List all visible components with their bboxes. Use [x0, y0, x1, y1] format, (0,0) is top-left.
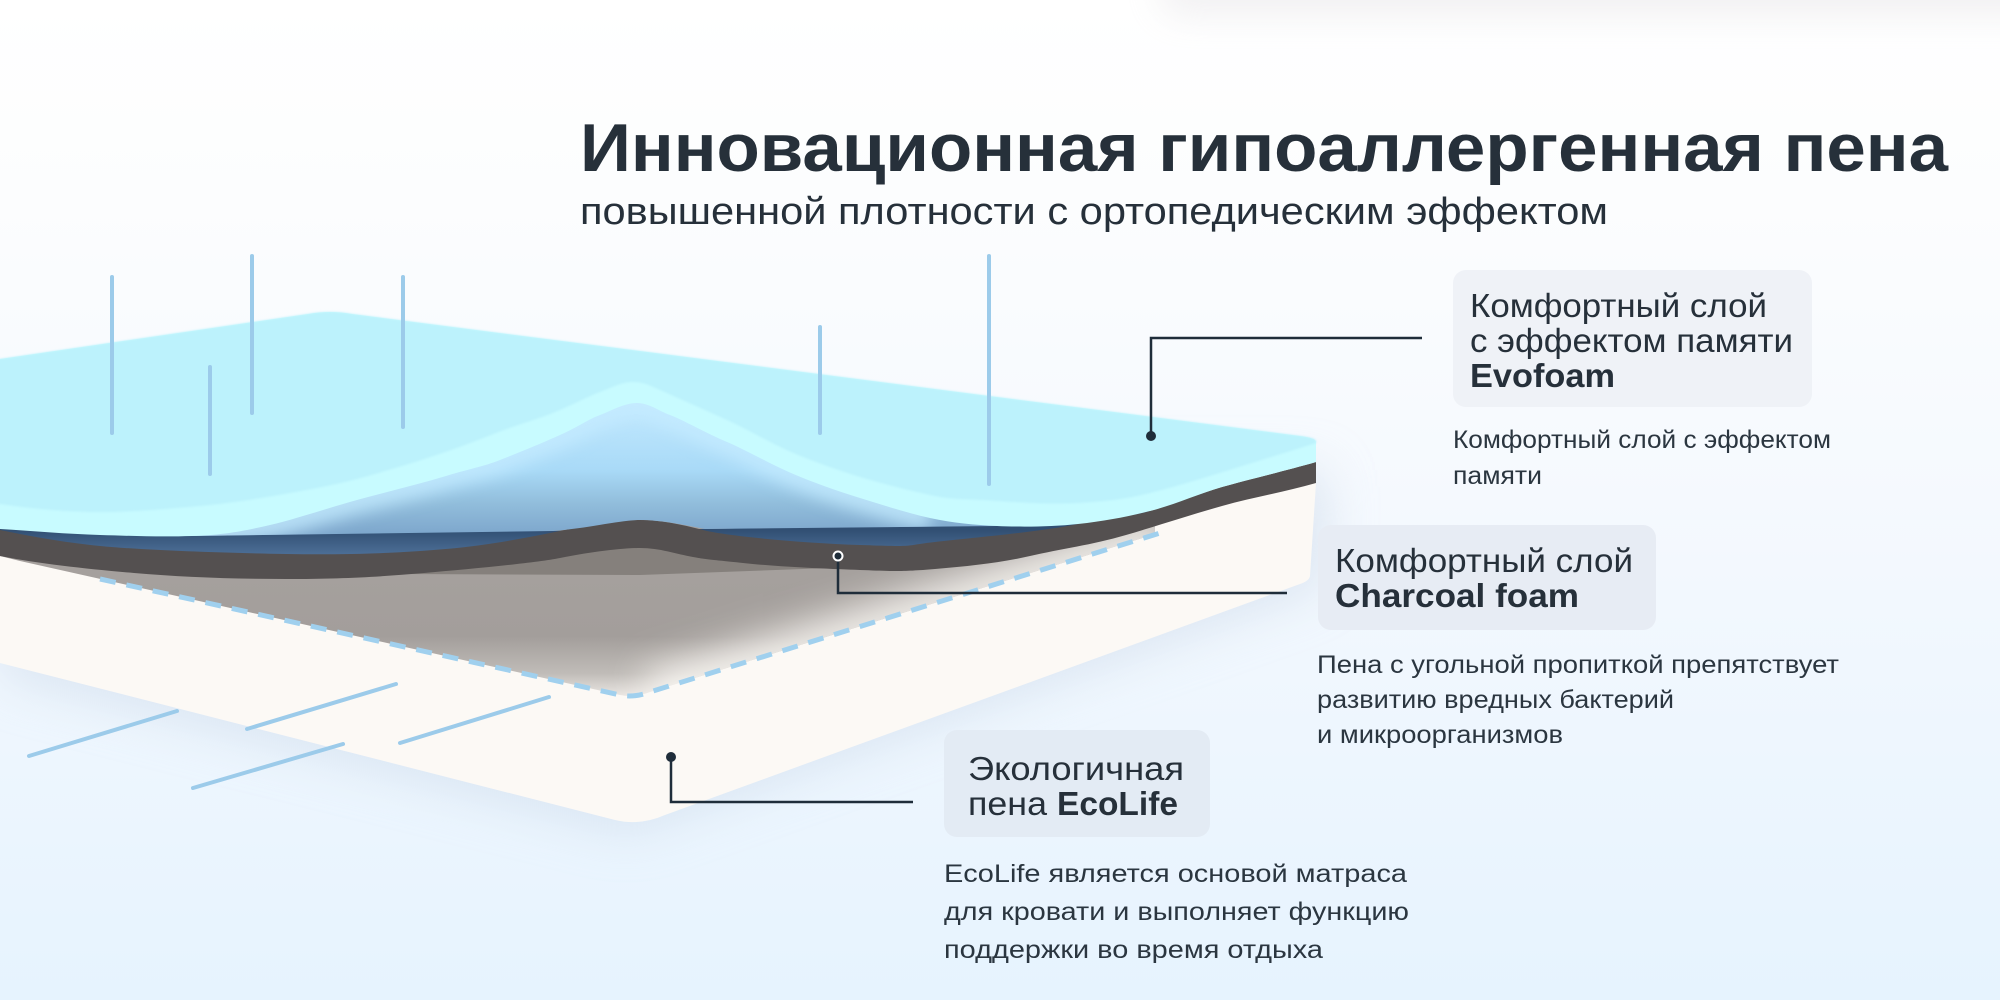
grey cutaway fade on right side: [650, 538, 1170, 700]
underside highlight: [196, 426, 936, 536]
label box: [1318, 525, 1656, 630]
description: для кровати и выполняет функцию: [944, 898, 1409, 926]
description: Комфортный слой с эффектом: [1453, 426, 1831, 454]
description: EcoLife является основой матраса: [944, 860, 1407, 888]
diagonal pressure lines: [29, 684, 549, 788]
label name: Charcoal foam: [1335, 577, 1579, 614]
mattress illustration: [0, 312, 1325, 832]
lifted foam underside: [192, 395, 997, 536]
description: поддержки во время отдыха: [944, 936, 1323, 964]
description: [1453, 426, 1831, 490]
memory foam top surface: [0, 312, 1316, 512]
leader dot: [834, 552, 842, 560]
description: памяти: [1453, 462, 1542, 490]
label name: EcoLife: [1057, 785, 1178, 822]
description: [944, 860, 1409, 964]
charcoal foam layer: [0, 462, 1316, 579]
subtitle: повышенной плотности с ортопедическим эффектом: [580, 191, 1608, 233]
leader line: [671, 757, 913, 802]
label text line 2: с эффектом памяти: [1470, 322, 1793, 359]
leader dot: [1146, 431, 1156, 441]
navy layer underside: [0, 505, 1150, 565]
vertical pressure lines: [112, 256, 989, 484]
title: Инновационная гипоаллергенная пена: [580, 110, 1949, 186]
memory foam edge band: [0, 312, 1316, 536]
dashed seam: [100, 533, 1160, 696]
label box: [944, 730, 1210, 837]
description: Пена с угольной пропиткой препятствует: [1317, 651, 1840, 679]
callout: EcoLife: [666, 730, 1409, 964]
description: развитию вредных бактерий: [1317, 686, 1674, 714]
leader dot: [666, 752, 676, 762]
description: и микроорганизмов: [1317, 721, 1563, 749]
mattress shadow: [0, 470, 1325, 832]
label text: Экологичная: [968, 750, 1184, 787]
leader line: [838, 556, 1287, 593]
label box: [1453, 270, 1812, 407]
top right soft shadow: [1160, 0, 2000, 15]
leader line: [1151, 338, 1422, 436]
lighter charcoal underside: [400, 530, 830, 575]
label text line 2: пена: [968, 785, 1048, 822]
label text: Комфортный слой: [1470, 287, 1767, 324]
label text: Комфортный слой: [1335, 542, 1633, 579]
callout: Evofoam: [1146, 270, 1831, 490]
label name: Evofoam: [1470, 357, 1615, 394]
callout: Charcoal foam: [834, 525, 1840, 749]
description: [1317, 651, 1840, 749]
EcoLife base layer: [0, 465, 1316, 822]
exposed grey cutaway: [0, 500, 1155, 696]
